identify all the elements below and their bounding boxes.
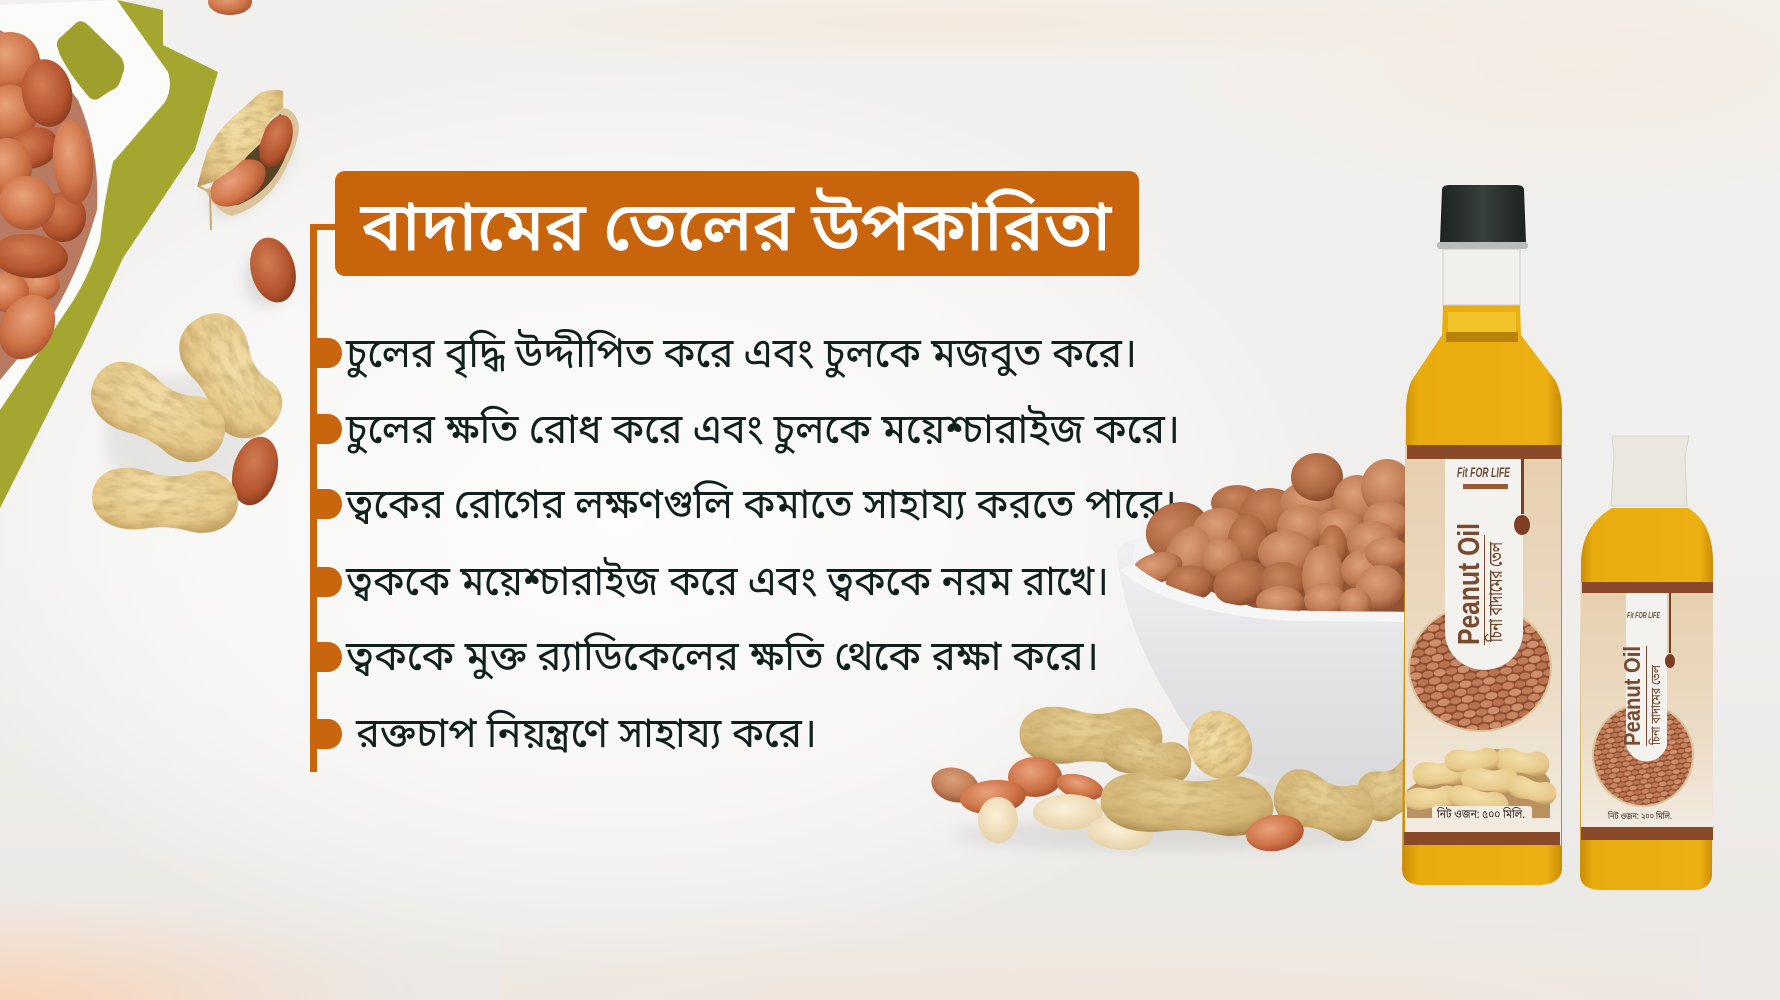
Bengali vertical subtitle: চিনা বাদামের তেল [1648, 665, 1666, 746]
title banner: বাদামের তেলের উপকারিতা [360, 188, 1112, 278]
half-open peanut shell [197, 90, 303, 230]
logo: Fit FOR LIFE [1627, 611, 1660, 620]
bullet 4 [310, 567, 342, 597]
Peanut Oil vertical title: Peanut Oil [1619, 646, 1645, 746]
loose peanuts in front of bowl [927, 699, 1439, 855]
white bowl of peanuts [1117, 453, 1460, 804]
benefit 3: ত্বকের রোগের লক্ষণগুলি কমাতে সাহায্য করতে পারে। [345, 480, 1177, 536]
clear neck [1443, 249, 1520, 305]
shelled peanuts on label [1404, 746, 1559, 818]
white tag [1626, 593, 1667, 761]
benefit list [345, 329, 1180, 765]
bullet 2 [310, 414, 342, 444]
benefit 5: ত্বককে মুক্ত র‍্যাডিকেলের ক্ষতি থেকে রক্ষা করে। [345, 632, 1099, 688]
bullet 1 [310, 338, 342, 368]
bullet 3 [310, 489, 342, 519]
net weight [1432, 806, 1532, 822]
large peanut oil bottle: নিট ওজন: ৫০০ মিলি. [1436, 806, 1525, 823]
drip [1514, 459, 1530, 535]
green powder well [57, 21, 124, 100]
Bengali vertical subtitle: চিনা বাদামের তেল [1484, 541, 1510, 643]
group of whole peanuts [79, 301, 294, 535]
benefit 1: চুলের বৃদ্ধি উদ্দীপিত করে এবং চুলকে মজবুত করে। [345, 329, 1137, 385]
large peanut oil bottle [1402, 185, 1562, 885]
label [1581, 582, 1713, 840]
white dish with green powder [0, 0, 170, 410]
timeline connector with bullets [310, 224, 342, 772]
logo [1457, 464, 1510, 489]
benefit 4: ত্বককে ময়েশ্চারাইজ করে এবং ত্বককে নরম রাখে। [345, 557, 1109, 613]
logo: Fit FOR LIFE [1457, 464, 1510, 480]
peanut circle [1409, 605, 1551, 731]
bullet 5 [310, 642, 342, 672]
white tag [1445, 459, 1523, 670]
green cloth napkin [0, 0, 218, 508]
bottle body with oil [1402, 305, 1562, 885]
bottle body with oil [1580, 508, 1713, 890]
Peanut Oil vertical title: Peanut Oil [1451, 523, 1486, 645]
small peanut oil bottle [1580, 436, 1713, 890]
single kernel [243, 232, 303, 308]
black cap [1440, 185, 1526, 242]
net weight: নিট ওজন: ২০০ মিলি. [1607, 810, 1672, 823]
benefit 6: রক্তচাপ নিয়ন্ত্রণে সাহায্য করে। [355, 709, 817, 765]
peanut kernels in dish [0, 30, 97, 380]
benefit 2: চুলের ক্ষতি রোধ করে এবং চুলকে ময়েশ্চারাইজ করে। [345, 405, 1180, 461]
single kernel top edge [208, 0, 252, 15]
drip [1665, 593, 1675, 668]
peanut circle [1593, 704, 1693, 806]
translucent flip cap [1611, 436, 1689, 506]
bullet 6 [310, 719, 342, 749]
label [1405, 445, 1561, 845]
